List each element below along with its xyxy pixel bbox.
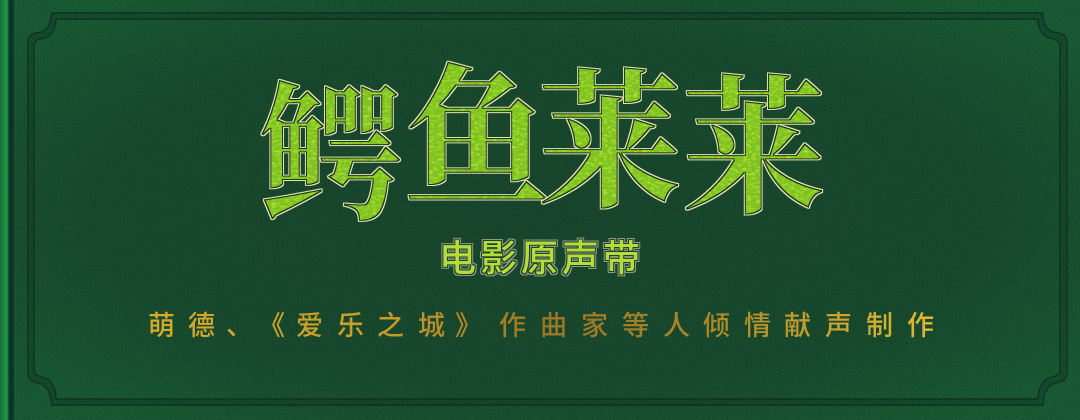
title: 鳄鱼莱莱: 莱 — [682, 67, 826, 234]
title: 鳄鱼莱莱: 莱 — [538, 61, 682, 228]
subtitle: 电影原声带: 电影原声带 — [439, 238, 640, 279]
title: 鳄鱼莱莱: 鳄 — [259, 74, 403, 241]
title: 鳄鱼莱莱 — [259, 56, 826, 241]
tagline: composers credit: 萌德、《爱乐之城》作曲家等人倾情献声制作 — [148, 311, 934, 341]
title: 鳄鱼莱莱: 鱼 — [402, 56, 552, 225]
book spine band on left edge — [0, 0, 14, 420]
